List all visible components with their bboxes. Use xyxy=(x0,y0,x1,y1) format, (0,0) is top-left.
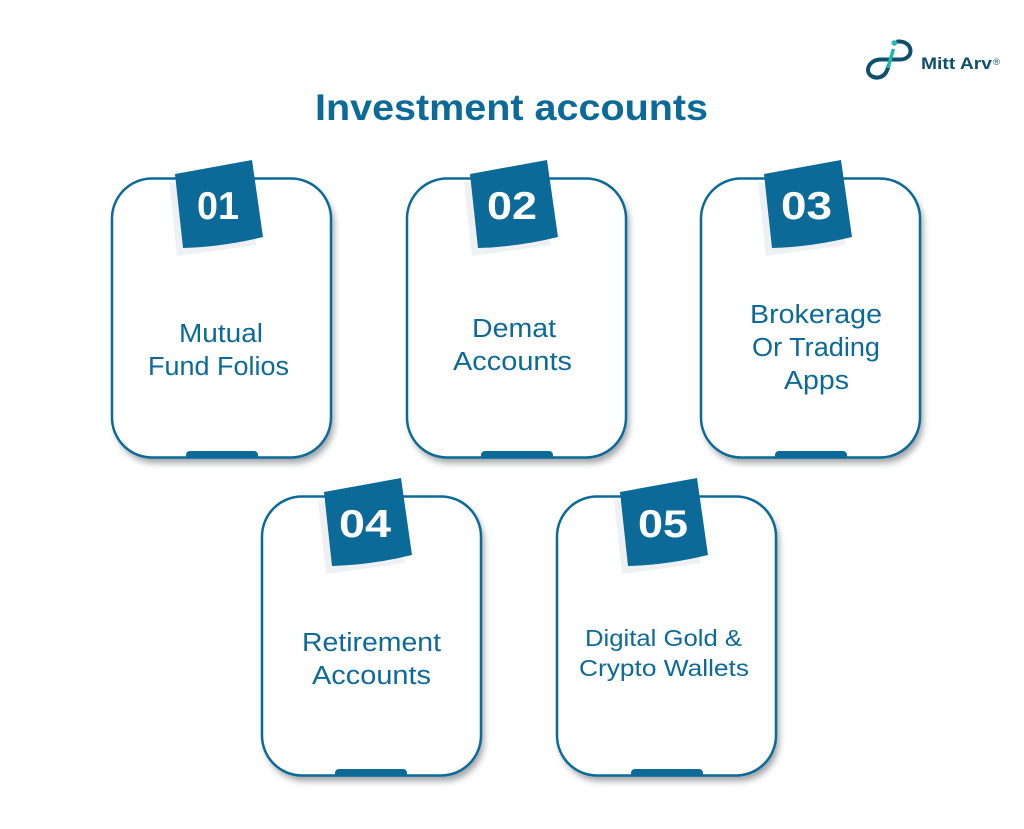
label: Demat xyxy=(472,315,556,343)
bottom tab xyxy=(631,769,703,775)
title: Investment accounts xyxy=(315,87,708,128)
label: Retirement xyxy=(302,629,441,657)
number: 02 xyxy=(487,185,537,228)
number tag xyxy=(324,478,412,566)
label: Or Trading xyxy=(752,334,880,362)
label xyxy=(453,315,572,376)
number: 05 xyxy=(638,503,688,546)
number tag shadow xyxy=(318,500,405,574)
number tag xyxy=(620,478,708,566)
label: Fund Folios xyxy=(148,353,289,381)
logo: Mitt Arv: Mitt Arv xyxy=(921,54,993,73)
panel: card 02 Demat Accounts xyxy=(407,160,629,463)
label: Apps xyxy=(784,367,849,395)
number tag shadow xyxy=(758,182,845,256)
number: 01 xyxy=(197,185,239,228)
number: 03 xyxy=(781,185,832,228)
number: 04 xyxy=(339,503,391,546)
label: Mutual xyxy=(179,320,263,348)
number tag shadow xyxy=(464,182,551,256)
number tag xyxy=(470,160,558,248)
label xyxy=(579,625,749,681)
label: Accounts xyxy=(453,348,572,376)
panel: card 03 Brokerage Or Trading Apps xyxy=(701,160,923,463)
panel: card 01 Mutual Fund Folios xyxy=(112,160,334,463)
label: Crypto Wallets xyxy=(579,655,749,681)
bottom tab xyxy=(481,451,553,457)
label: Accounts xyxy=(312,662,431,690)
bottom tab xyxy=(186,451,258,457)
panel: card 05 Digital Gold & Crypto Wallets xyxy=(557,478,779,781)
number tag xyxy=(764,160,852,248)
label xyxy=(148,320,289,381)
label xyxy=(750,301,882,395)
bottom tab xyxy=(775,451,847,457)
number tag shadow xyxy=(169,182,256,256)
number tag xyxy=(175,160,263,248)
label: Brokerage xyxy=(750,301,882,329)
panel: card 04 Retirement Accounts xyxy=(262,478,484,781)
logo: Mitt Arv xyxy=(868,40,1000,78)
label: Digital Gold & xyxy=(585,625,742,651)
label xyxy=(302,629,441,690)
bottom tab xyxy=(335,769,407,775)
logo: Mitt Arv: ® xyxy=(993,57,1000,68)
number tag shadow xyxy=(614,500,701,574)
